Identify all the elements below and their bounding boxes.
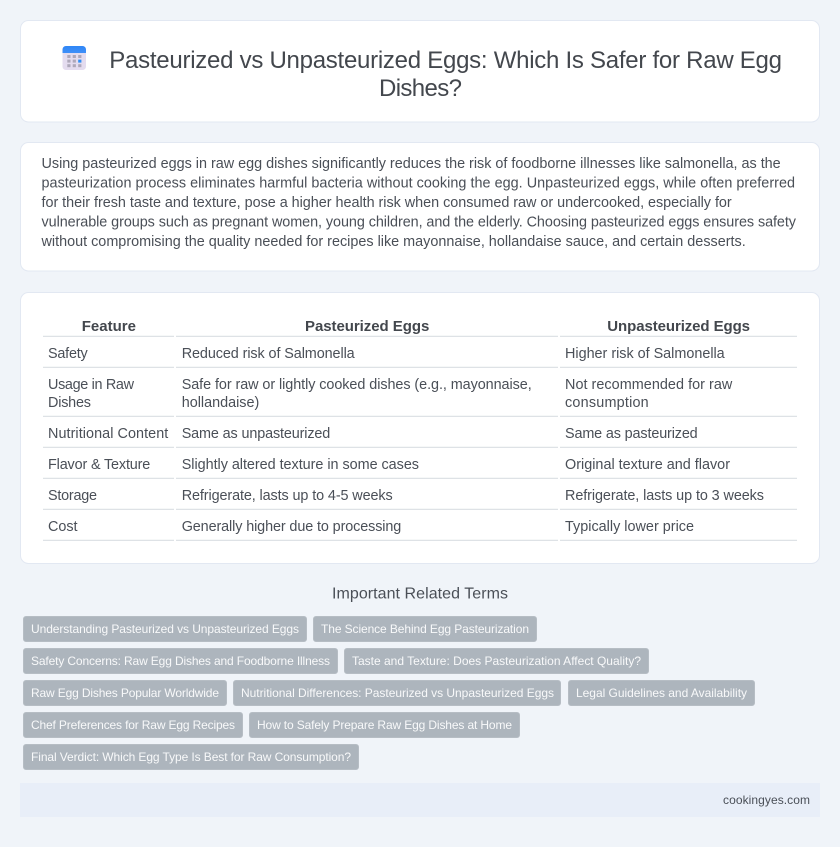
- icon: calendar: [62, 46, 86, 70]
- table header row: Feature: [82, 318, 136, 335]
- header panel: [20, 20, 820, 122]
- row: nutritional content: Nutritional Content: [48, 426, 168, 442]
- row: usage in raw dishes: Not recommended for raw: [565, 377, 733, 393]
- table header row: Unpasteurized Eggs: [607, 318, 750, 335]
- row: safety: Safety: [48, 346, 88, 362]
- intro text block: [40, 156, 797, 250]
- intro text block: for their fresh taste and texture, pose a higher health risk when consumed raw or undercooked, especially for: [42, 195, 732, 211]
- table header row: Pasteurized Eggs: [305, 318, 429, 335]
- panel: comparison table: [20, 292, 820, 564]
- row: nutritional content: Same as pasteurized: [565, 426, 698, 442]
- row: cost: Generally higher due to processing: [182, 519, 401, 535]
- intro text block: without compromising the quality needed for recipes like mayonnaise, hollandaise sauce, and certain desserts.: [40, 234, 746, 250]
- tag: [24, 744, 358, 770]
- row: flavor and texture: Original texture and flavor: [565, 457, 730, 473]
- tag: [234, 680, 560, 706]
- row: safety: Higher risk of Salmonella: [565, 346, 725, 362]
- title: Pasteurized vs Unpasteurized Eggs: Which Is Safer for Raw Egg: [109, 47, 782, 74]
- row: cost: Cost: [48, 519, 78, 535]
- title: [109, 47, 782, 102]
- panel: intro paragraph: [20, 142, 820, 271]
- row: usage in raw dishes: Usage in Raw: [48, 377, 135, 393]
- row: storage: Refrigerate, lasts up to 3 weeks: [565, 488, 764, 504]
- row: usage in raw dishes: hollandaise): [182, 395, 259, 411]
- tag: Nutritional Differences: Pasteurized vs Unpasteurized Eggs: [241, 686, 554, 700]
- row: usage in raw dishes: Dishes: [48, 395, 91, 411]
- tag: [24, 712, 242, 738]
- row: flavor and texture: Slightly altered texture in some cases: [182, 457, 419, 473]
- tag: The Science Behind Egg Pasteurization: [321, 622, 529, 636]
- tag: Taste and Texture: Does Pasteurization Affect Quality?: [352, 654, 641, 668]
- row: safety: [48, 346, 725, 362]
- tag: How to Safely Prepare Raw Egg Dishes at Home: [257, 718, 512, 732]
- tag: [250, 712, 520, 738]
- related term tags: [24, 616, 754, 770]
- tag: Chef Preferences for Raw Egg Recipes: [31, 718, 235, 732]
- row: flavor and texture: [48, 457, 730, 473]
- intro text block: pasteurization process eliminates harmful bacteria without cooking the egg. Unpasteurized eggs, while often preferred: [42, 176, 795, 192]
- heading: important related terms: Important Related Terms: [332, 586, 508, 602]
- row: usage in raw dishes: consumption: [565, 395, 649, 411]
- tag: Safety Concerns: Raw Egg Dishes and Foodborne Illness: [31, 654, 330, 668]
- tag: Raw Egg Dishes Popular Worldwide: [31, 686, 219, 700]
- row: cost: [48, 519, 694, 535]
- row: nutritional content: [48, 426, 698, 442]
- row: usage in raw dishes: Safe for raw or lightly cooked dishes (e.g., mayonnaise,: [182, 377, 532, 393]
- tag: Legal Guidelines and Availability: [576, 686, 747, 700]
- row: usage in raw dishes: [48, 377, 733, 411]
- tag: [24, 680, 226, 706]
- tag: Final Verdict: Which Egg Type Is Best for Raw Consumption?: [31, 750, 351, 764]
- row: storage: Storage: [48, 488, 97, 504]
- tag: [568, 680, 754, 706]
- intro text block: vulnerable groups such as pregnant women, young children, and the elderly. Choosing pasteurized eggs ensures safety: [42, 215, 797, 231]
- footer bar: [20, 783, 820, 817]
- tag: [344, 648, 648, 674]
- footer source text: cookingyes.com: [723, 793, 810, 807]
- row: flavor and texture: Flavor & Texture: [48, 457, 150, 473]
- row: cost: Typically lower price: [565, 519, 694, 535]
- title: Dishes?: [379, 75, 462, 102]
- table header row: [82, 318, 750, 335]
- row: nutritional content: Same as unpasteurized: [182, 426, 330, 442]
- row: storage: Refrigerate, lasts up to 4-5 weeks: [182, 488, 393, 504]
- row: storage: [48, 488, 764, 504]
- tag: [24, 648, 338, 674]
- tag: [24, 616, 306, 642]
- row: safety: Reduced risk of Salmonella: [182, 346, 355, 362]
- tag: [314, 616, 536, 642]
- tag: Understanding Pasteurized vs Unpasteurized Eggs: [31, 622, 299, 636]
- intro text block: Using pasteurized eggs in raw egg dishes significantly reduces the risk of foodborne illnesses like salmonella, as the: [42, 156, 781, 172]
